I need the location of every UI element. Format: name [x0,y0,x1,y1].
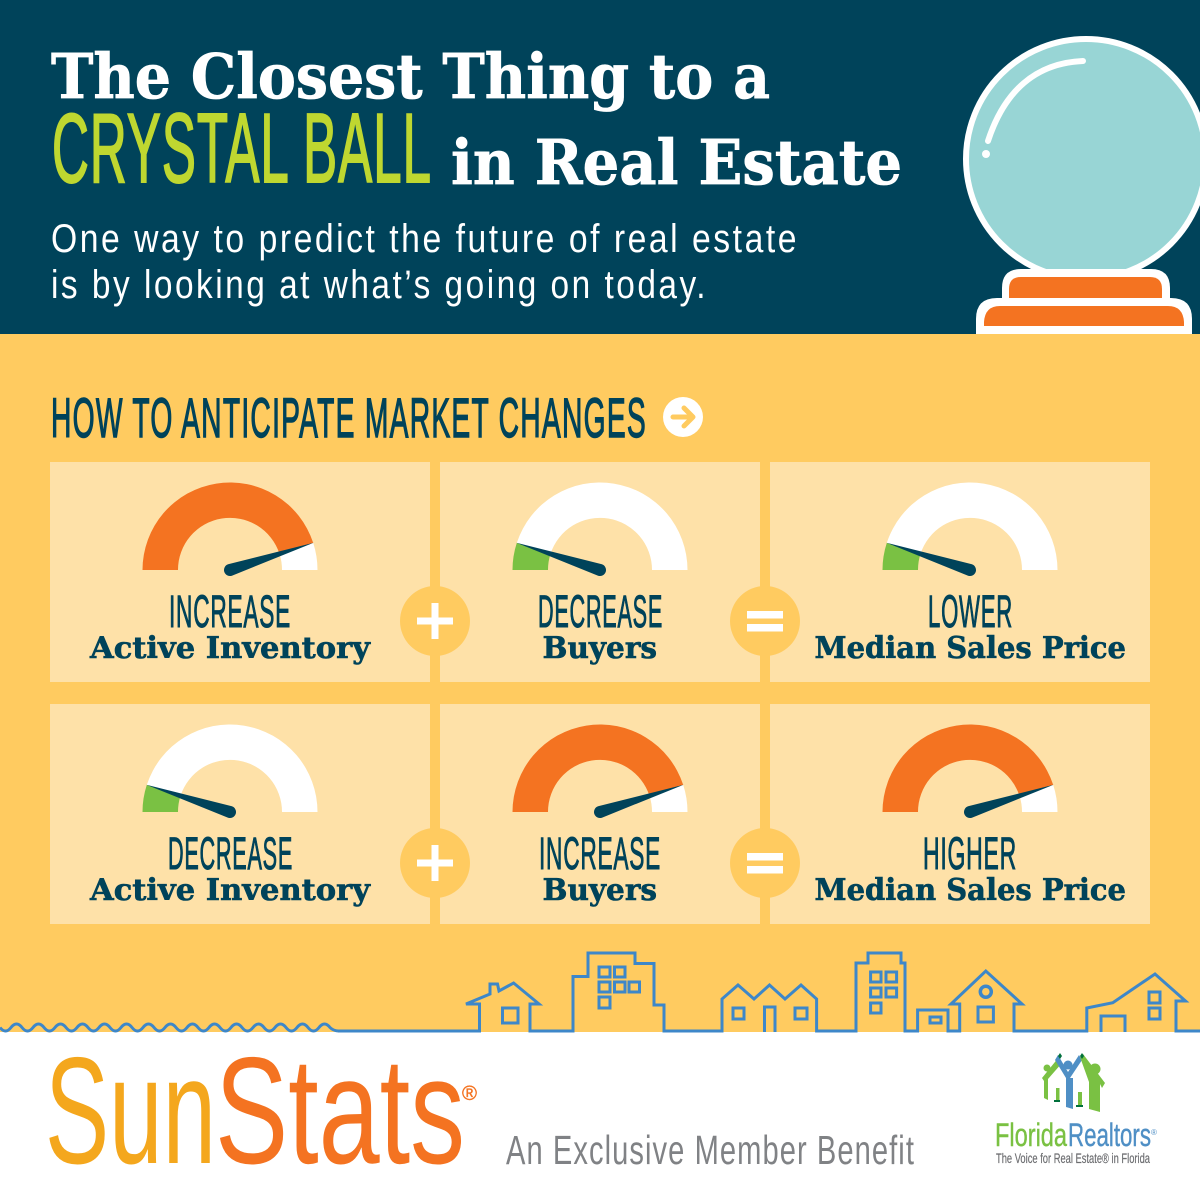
logo: SunStats [45,1026,477,1196]
sublabel: Active Inventory [89,631,372,666]
icon: people houses [1042,1053,1105,1112]
icon: crystal ball [966,39,1200,334]
title: CRYSTAL BALL [52,93,432,203]
logo: Florida Realtors: Realtors [1068,1117,1151,1153]
gauge [142,482,318,576]
logo: Florida Realtors [995,1053,1157,1166]
panel: decrease buyers [440,462,760,682]
panel: decrease active inventory: DECREASE [168,828,293,879]
label: INCREASE [169,586,291,637]
icon: arrow [663,397,703,437]
body background [0,334,1200,1032]
tagline: An Exclusive Member Benefit [506,1127,915,1173]
panel: increase active inventory [50,462,430,682]
sublabel: Buyers [542,631,657,666]
logo: SunStats: ® [462,1083,477,1105]
skyline illustration [0,953,1200,1032]
icon: equals row 1 [730,586,800,656]
sublabel: Median Sales Price [814,631,1126,666]
gauge [142,724,318,818]
logo: SunStats: Stats [215,1026,465,1196]
title [51,40,902,203]
gauge [882,482,1058,576]
section heading: HOW TO ANTICIPATE MARKET CHANGES [51,386,647,449]
panel: higher median sales price [770,704,1150,924]
subtitle [51,217,799,307]
panel: lower median sales price [770,462,1150,682]
subtitle: is by looking at what’s going on today. [51,263,708,307]
title: The Closest Thing to a [51,40,770,113]
footer background [0,1032,1200,1200]
sublabel: Active Inventory [89,873,372,908]
gauge [512,724,688,818]
panel: decrease active inventory [50,704,430,924]
icon: plus row 1 [400,586,470,656]
logo: Florida Realtors: ® [1151,1128,1157,1137]
label: INCREASE [539,828,661,879]
panel: lower median sales price: LOWER [928,586,1013,637]
subtitle: One way to predict the future of real estate [51,217,799,261]
gauge [512,482,688,576]
logo: SunStats: Sun [45,1026,216,1196]
panel: increase buyers [440,704,760,924]
sublabel: Median Sales Price [814,873,1126,908]
sublabel: Buyers [542,873,657,908]
icon: plus row 2 [400,828,470,898]
label: HIGHER [923,828,1017,879]
icon: equals row 2 [730,828,800,898]
wordmark: Florida [995,1117,1067,1153]
panel: decrease buyers: DECREASE [538,586,663,637]
gauge [882,724,1058,818]
title: in Real Estate [451,126,902,199]
header band [0,0,1200,334]
